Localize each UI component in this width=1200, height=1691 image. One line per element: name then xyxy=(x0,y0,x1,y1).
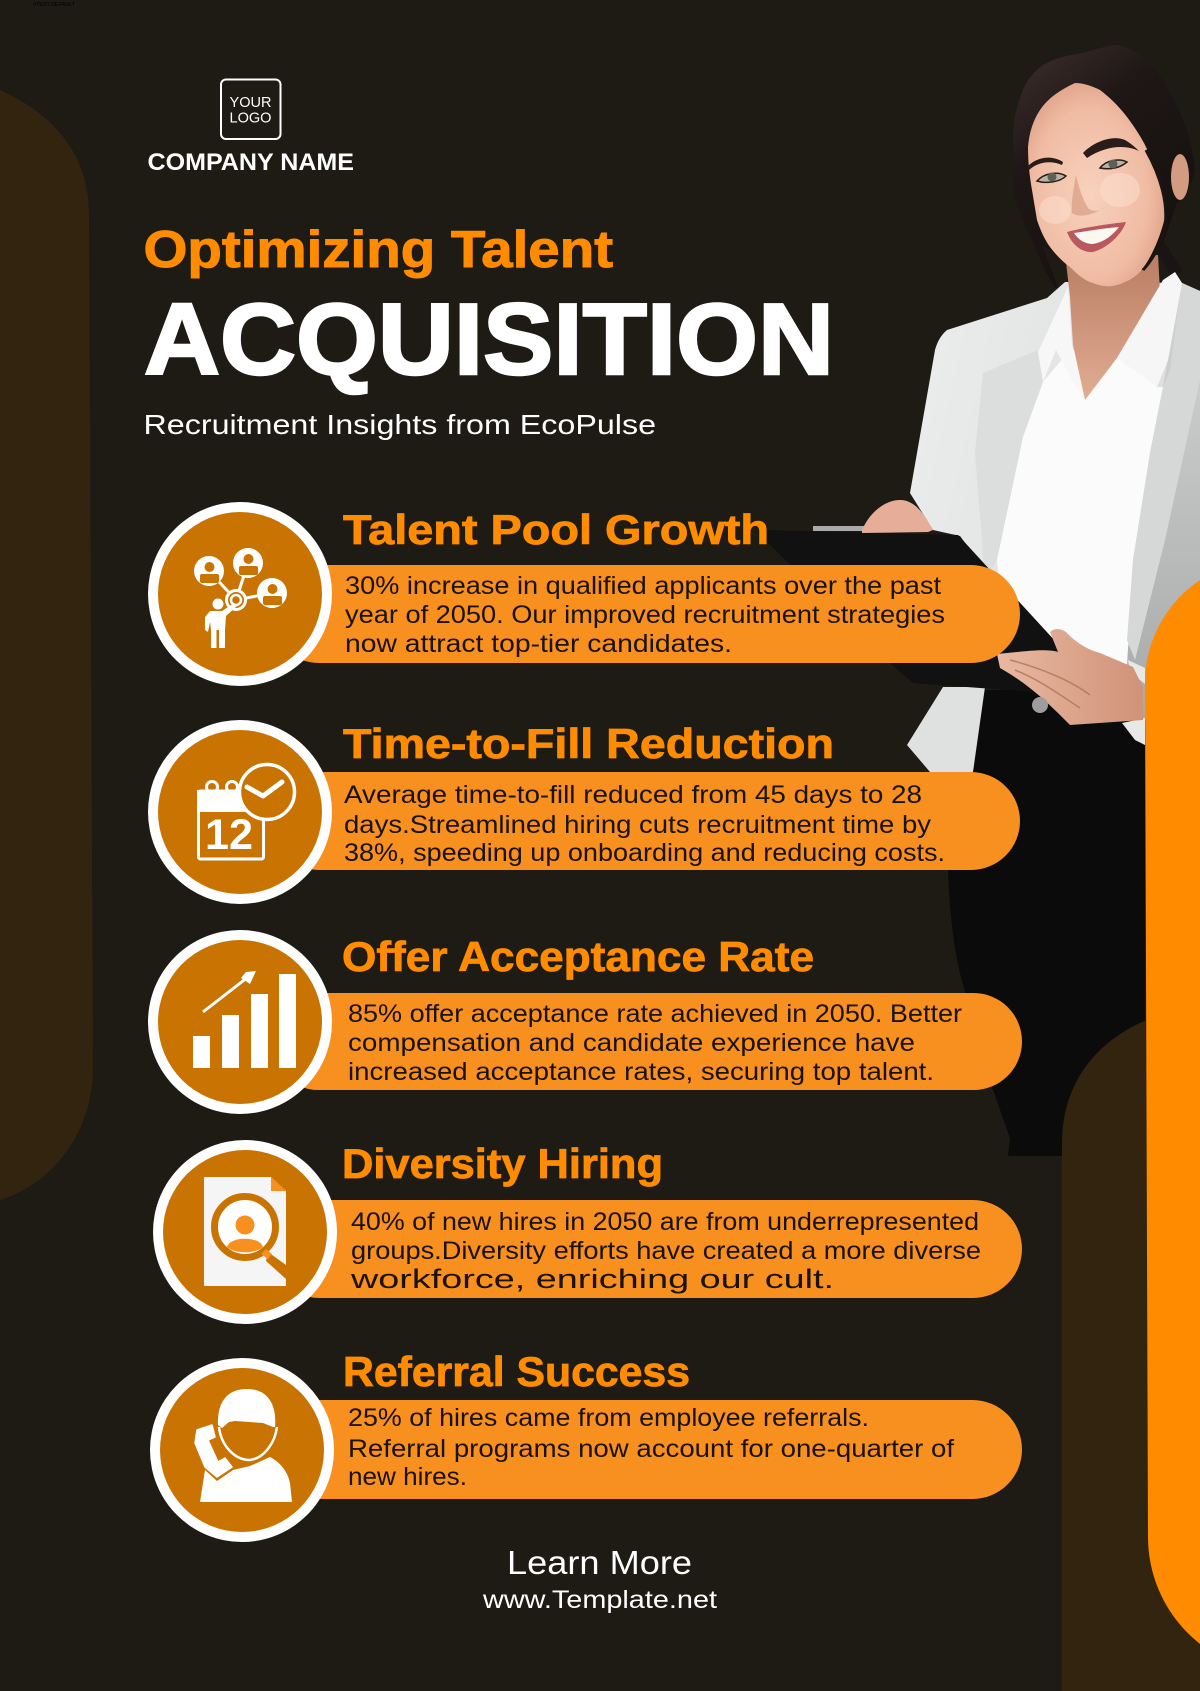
body text xyxy=(345,572,945,658)
blazer right xyxy=(1120,283,1200,720)
left eye xyxy=(1037,173,1066,182)
shirt xyxy=(997,350,1163,665)
body text: 25% of hires came from employee referrals. xyxy=(348,1404,869,1432)
body text: increased acceptance rates, securing top talent. xyxy=(348,1058,934,1086)
icon: rising bar chart xyxy=(148,930,332,1114)
jacket flap xyxy=(907,687,985,772)
heading: Offer Acceptance Rate xyxy=(342,933,814,980)
right eyebrow xyxy=(1083,138,1139,158)
finger lines xyxy=(1010,660,1090,708)
pill xyxy=(270,565,1020,663)
heading: Referral Success xyxy=(343,1348,690,1395)
footer: learn more: Learn More xyxy=(507,1544,692,1581)
panel: talent pool growth xyxy=(148,502,1020,686)
right orange arch xyxy=(1145,559,1200,1691)
body text: year of 2050. Our improved recruitment strategies xyxy=(345,601,945,629)
left cheek highlight xyxy=(1039,196,1071,224)
heading: Talent Pool Growth xyxy=(343,506,769,553)
pill xyxy=(270,1400,1022,1499)
teeth xyxy=(1074,227,1119,244)
body text xyxy=(348,1000,962,1086)
photo: businesswoman with clipboard xyxy=(767,45,1200,1156)
neck xyxy=(1066,255,1160,400)
right lapel xyxy=(1127,283,1200,660)
pill xyxy=(270,1200,1022,1298)
company name: COMPANY NAME xyxy=(148,149,354,176)
title line 1: Optimizing Talent xyxy=(144,221,613,279)
right hand xyxy=(997,629,1143,725)
title line 2: ACQUISITION xyxy=(144,284,834,396)
logo xyxy=(221,80,280,139)
icon: calendar and clock xyxy=(148,720,332,904)
lips xyxy=(1067,222,1126,252)
icon: network and person xyxy=(148,502,332,686)
panel: time-to-fill reduction xyxy=(148,720,1020,904)
pill xyxy=(270,772,1020,870)
body text: now attract top-tier candidates. xyxy=(345,630,732,658)
body text xyxy=(344,781,945,867)
right iris xyxy=(1108,160,1118,168)
body text xyxy=(350,1208,981,1294)
icon: document with magnifier xyxy=(153,1140,337,1324)
body text: Referral programs now account for one-quarter of xyxy=(348,1435,954,1463)
right cheek highlight xyxy=(1100,173,1140,207)
shirt cuff xyxy=(1122,660,1145,745)
left collar xyxy=(1038,287,1085,400)
footer: website: www.Template.net xyxy=(482,1586,717,1614)
icon: calendar and clock: 12 xyxy=(205,811,253,859)
body text: 30% increase in qualified applicants over the past xyxy=(345,572,941,600)
icon: person on phone xyxy=(150,1358,334,1542)
panel: offer acceptance rate xyxy=(148,930,1022,1114)
body text: workforce, enriching our cult. xyxy=(350,1264,834,1294)
right collar xyxy=(1117,272,1182,387)
pill xyxy=(270,993,1022,1090)
ear xyxy=(1171,154,1189,200)
left decorative arch xyxy=(0,90,93,1200)
corner default label: #TEXT DEFAULT xyxy=(33,2,76,8)
body text: days.Streamlined hiring cuts recruitment time by xyxy=(344,811,932,839)
body text: groups.Diversity efforts have created a more diverse xyxy=(351,1237,981,1265)
logo text top: YOUR xyxy=(230,94,272,111)
body text: compensation and candidate experience have xyxy=(348,1029,915,1057)
body text: 38%, speeding up onboarding and reducing costs. xyxy=(344,839,945,867)
left hand xyxy=(862,500,933,533)
right brown arch xyxy=(1062,1015,1200,1691)
trouser button xyxy=(1032,697,1048,713)
panel: diversity hiring xyxy=(153,1140,1022,1324)
hair strand over cheek xyxy=(1143,150,1166,270)
panel: referral success xyxy=(150,1348,1022,1542)
clipboard clip xyxy=(813,526,900,531)
subtitle: Recruitment Insights from EcoPulse xyxy=(144,409,656,440)
body text: Average time-to-fill reduced from 45 days to 28 xyxy=(344,781,922,809)
trousers xyxy=(948,690,1145,1156)
hair xyxy=(1013,45,1195,288)
logo frame xyxy=(221,80,280,139)
blazer left xyxy=(910,282,1200,660)
nose shadow xyxy=(1072,175,1105,216)
face xyxy=(1028,83,1166,286)
left eyebrow xyxy=(1028,158,1063,170)
left lapel xyxy=(975,350,1043,580)
heading: Diversity Hiring xyxy=(342,1140,663,1187)
body text: 40% of new hires in 2050 are from underrepresented xyxy=(351,1208,979,1236)
right eye xyxy=(1100,160,1127,169)
logo text bottom: LOGO xyxy=(230,110,272,126)
back hair strand xyxy=(1155,235,1183,274)
body text: new hires. xyxy=(348,1463,467,1491)
left iris xyxy=(1048,172,1056,182)
body text: 85% offer acceptance rate achieved in 2050. Better xyxy=(348,1000,962,1028)
body text xyxy=(348,1404,954,1491)
heading: Time-to-Fill Reduction xyxy=(343,720,834,767)
clipboard xyxy=(767,530,1067,692)
